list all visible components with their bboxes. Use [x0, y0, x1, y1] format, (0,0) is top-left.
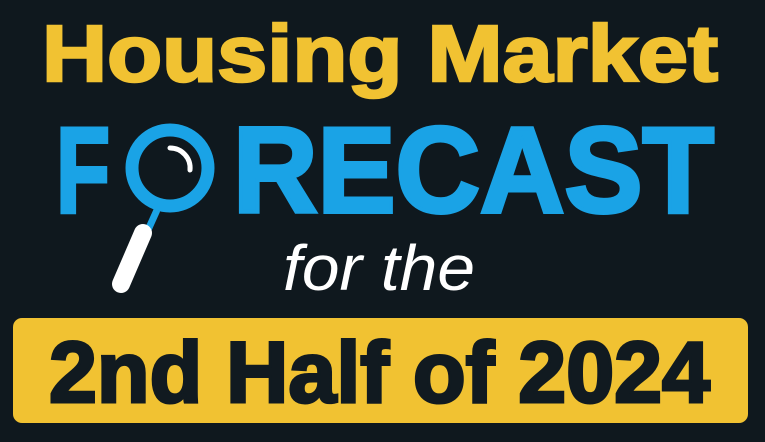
- icon: magnifying glass: [121, 130, 208, 284]
- heading: FORECAST: F: [56, 102, 110, 238]
- banner: 2nd Half of 2024: 2nd Half of 2024: [49, 325, 710, 421]
- subheading: for the: for the: [283, 232, 475, 304]
- heading: FORECAST: RECAST: [233, 102, 714, 238]
- title: Housing Market: Housing Market: [42, 9, 718, 98]
